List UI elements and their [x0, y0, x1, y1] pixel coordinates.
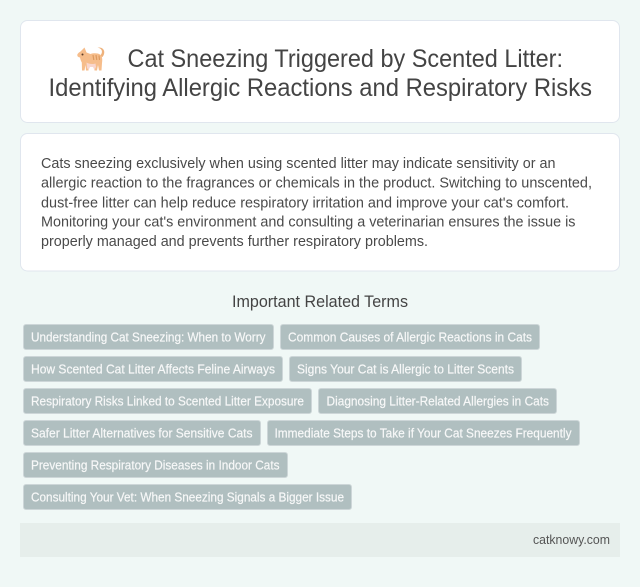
- tag: [24, 452, 288, 478]
- tag: [24, 356, 282, 382]
- tag: Safer Litter Alternatives for Sensitive Cats: [31, 426, 253, 440]
- tag: [24, 484, 352, 510]
- summary text: dust-free litter can help reduce respiratory irritation and improve your cat's comfort.: [41, 194, 569, 212]
- panel: summary card: [20, 134, 620, 271]
- tag: Preventing Respiratory Diseases in Indoor Cats: [31, 458, 280, 472]
- summary text: Monitoring your cat's environment and consulting a veterinarian ensures the issue is: [41, 214, 576, 230]
- footer: catknowy.com: [533, 532, 610, 547]
- tag: Common Causes of Allergic Reactions in Cats: [288, 330, 532, 344]
- title: Identifying Allergic Reactions and Respiratory Risks: [48, 74, 592, 102]
- tag: [318, 388, 556, 414]
- tag: [24, 324, 274, 350]
- tag: Consulting Your Vet: When Sneezing Signals a Bigger Issue: [31, 490, 344, 504]
- icon: orange cat: [77, 48, 104, 70]
- tag: [290, 356, 522, 382]
- tag: [24, 420, 260, 446]
- summary text: Cats sneezing exclusively when using scented litter may indicate sensitivity or an: [41, 155, 556, 172]
- tag: [268, 420, 580, 446]
- title: Cat Sneezing Triggered by Scented Litter:: [128, 45, 563, 73]
- panel: title card: [20, 20, 620, 122]
- tag: Signs Your Cat is Allergic to Litter Scents: [297, 362, 514, 376]
- tag: Understanding Cat Sneezing: When to Worry: [31, 330, 266, 344]
- footer: [20, 523, 620, 557]
- tag: [24, 388, 312, 414]
- heading: important related terms: Important Related Terms: [232, 293, 408, 311]
- tag: [280, 324, 540, 350]
- tag: How Scented Cat Litter Affects Feline Airways: [31, 362, 275, 376]
- tag: Diagnosing Litter-Related Allergies in Cats: [326, 394, 549, 408]
- tags: related terms: [24, 324, 580, 510]
- tag: Respiratory Risks Linked to Scented Litter Exposure: [31, 394, 304, 408]
- title: [48, 45, 592, 102]
- summary text: [41, 155, 592, 250]
- summary text: allergic reaction to the fragrances or chemicals in the product. Switching to unscented,: [41, 174, 592, 192]
- tag: Immediate Steps to Take if Your Cat Sneezes Frequently: [274, 426, 572, 440]
- summary text: properly managed and prevents further respiratory problems.: [41, 233, 428, 250]
